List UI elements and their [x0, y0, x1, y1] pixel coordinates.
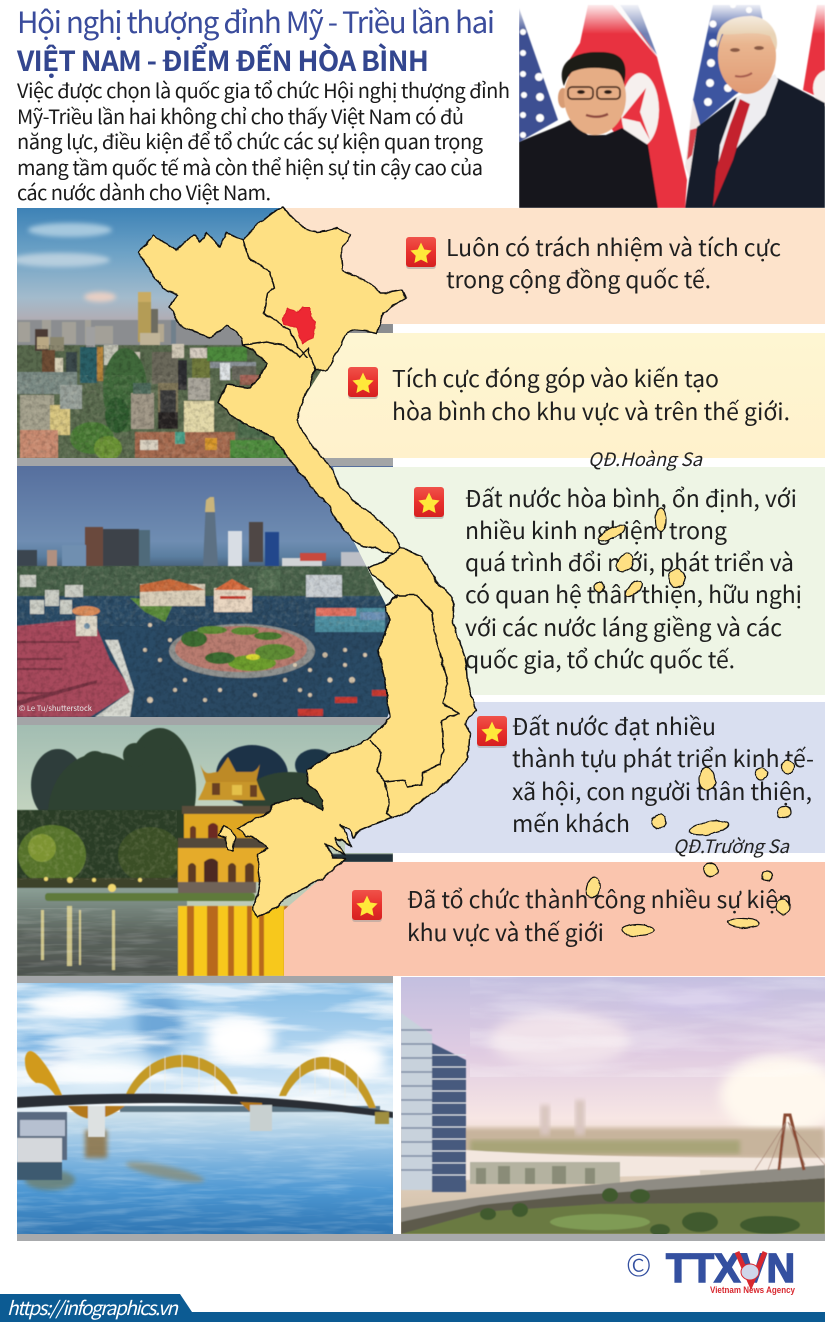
- Trump: [685, 78, 825, 208]
- panel: peaceful and stable country: có quan hệ thân thiện, hữu nghị: [465, 576, 802, 610]
- panel: development achievements: thành tựu phát triển kinh tế-: [512, 740, 814, 774]
- panel: development achievements: [345, 702, 825, 853]
- panel: hosting events: khu vực và thế giới: [407, 914, 604, 948]
- map of Vietnam: [138, 207, 794, 936]
- photo: Hanoi riverside development: [401, 977, 825, 1236]
- panel: peaceful and stable country: với các nước láng giềng và các: [465, 609, 782, 643]
- title: [16, 0, 495, 80]
- map: Hanoi region: [282, 307, 315, 343]
- panel: development achievements: Đất nước đạt nhiều: [512, 708, 716, 742]
- icon: flag: [477, 716, 507, 748]
- logo: copyright TTXVN: Vietnam News Agency: [710, 1285, 796, 1296]
- intro paragraph: Việc được chọn là quốc gia tổ chức Hội nghị thượng đỉnh: [17, 75, 510, 104]
- panel: responsible member: [285, 208, 825, 324]
- photo: Ho Chi Minh City roundabout: © Le Tu/shutterstock: [19, 703, 93, 714]
- map: mainland outline: [138, 207, 477, 918]
- panel: peaceful and stable country: quá trình đổi mới, phát triển và: [465, 544, 794, 578]
- panel: responsible member: trong cộng đồng quốc tế.: [446, 261, 711, 295]
- icon: flag: [352, 890, 382, 922]
- panel: hosting events: [284, 862, 825, 976]
- panel: contributing to peace: [290, 333, 825, 458]
- panel: development achievements: xã hội, con người thân thiện,: [512, 773, 812, 807]
- panel: contributing to peace: Tích cực đóng góp vào kiến tạo: [392, 360, 719, 394]
- intro paragraph: Mỹ-Triều lần hai không chỉ cho thấy Việt Nam có đủ: [17, 101, 464, 130]
- icon: flag: [348, 367, 378, 399]
- photo: Hanoi city: [10, 208, 393, 460]
- icon: flag: [406, 237, 436, 269]
- label: Truong Sa: QĐ.Trường Sa: [673, 833, 791, 859]
- intro paragraph: các nước dành cho Việt Nam.: [17, 177, 271, 206]
- grey divider strips: [17, 458, 393, 983]
- grey base strip under photos: [17, 1234, 825, 1241]
- map: internal borders: [243, 240, 458, 818]
- intro paragraph: [17, 75, 510, 206]
- footer bar: https://infographics.vn: [7, 1294, 179, 1321]
- panel: peaceful and stable country: quốc gia, tổ chức quốc tế.: [465, 641, 735, 675]
- photo: Dragon bridge, Da Nang: [10, 983, 393, 1234]
- panel: contributing to peace: hòa bình cho khu vực và trên thế giới.: [392, 393, 790, 427]
- panel: responsible member: Luôn có trách nhiệm và tích cực: [446, 229, 781, 263]
- Kim: [519, 120, 658, 208]
- map: Con Dao shape: [218, 826, 235, 851]
- intro paragraph: mang tầm quốc tế mà còn thể hiện sự tin cậy cao của: [17, 152, 483, 181]
- panel: hosting events: Đã tổ chức thành công nhiều sự kiện: [407, 881, 792, 915]
- title: VIỆT NAM - ĐIỂM ĐẾN HÒA BÌNH: [16, 40, 429, 80]
- logo: copyright TTXVN: TTXVN: [666, 1245, 795, 1291]
- photo: Ho Chi Minh City roundabout: [17, 466, 393, 717]
- panel: peaceful and stable country: [333, 467, 825, 695]
- map: Truong Sa islands: [584, 761, 794, 936]
- logo: copyright TTXVN: ©: [626, 1240, 651, 1285]
- title: Hội nghị thượng đỉnh Mỹ - Triều lần hai: [17, 0, 495, 42]
- photo: leaders with flags: [519, 0, 825, 208]
- label: Hoang Sa: QĐ.Hoàng Sa: [588, 446, 704, 472]
- footer bar: [0, 1294, 825, 1322]
- map: Hoang Sa islands: [594, 508, 685, 599]
- panel: peaceful and stable country: nhiều kinh nghiệm trong: [465, 512, 727, 546]
- icon: flag: [414, 487, 444, 519]
- intro paragraph: năng lực, điều kiện để tổ chức các sự kiện quan trọng: [17, 126, 483, 155]
- photo: Turtle Tower, Hoan Kiem lake: [17, 725, 393, 976]
- logo: copyright TTXVN: [626, 1240, 796, 1296]
- panel: development achievements: mến khách: [512, 805, 630, 839]
- panel: peaceful and stable country: Đất nước hòa bình, ổn định, với: [465, 480, 797, 514]
